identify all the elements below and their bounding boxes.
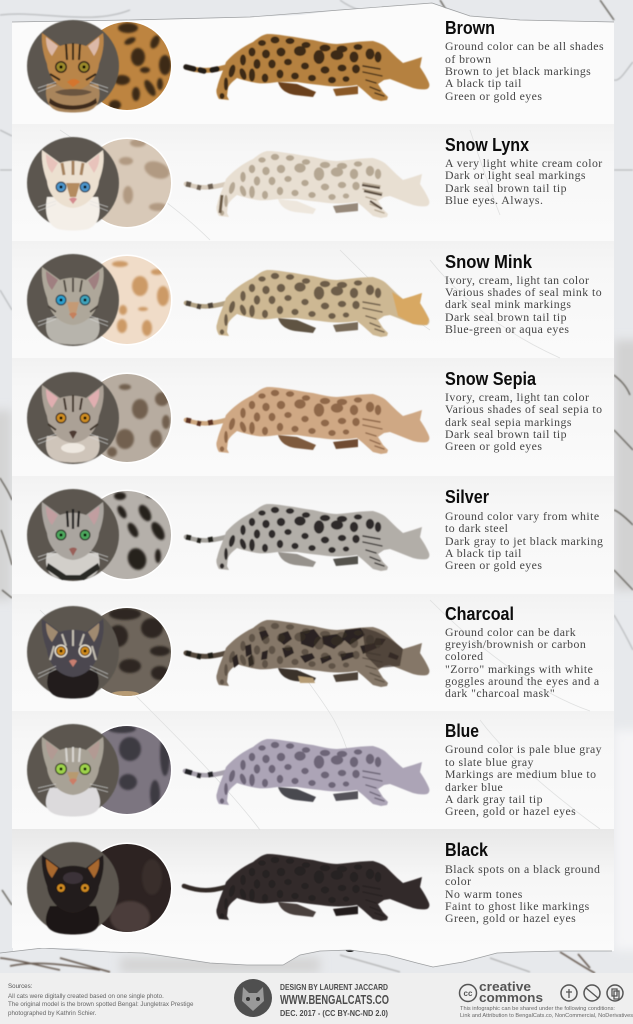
- description: Blue eyes. Always.: [445, 193, 543, 207]
- face portrait: [27, 606, 119, 698]
- row: Snow Mink: [27, 254, 429, 349]
- row: Blue: [27, 724, 429, 819]
- description: A very light white cream color: [445, 156, 603, 170]
- description: dark seal sepia markings: [445, 415, 572, 429]
- design credit: DESIGN BY LAURENT JACCARD: [280, 982, 388, 992]
- fur swatch: [101, 22, 171, 110]
- fur swatch: [101, 606, 171, 696]
- face portrait: [27, 724, 119, 816]
- description: Dark seal brown tail tip: [445, 427, 567, 441]
- full body cat: [186, 387, 429, 454]
- full body cat: [186, 151, 429, 218]
- description: dark seal mink markings: [445, 297, 571, 311]
- description: Green or gold eyes: [445, 439, 542, 453]
- description: Various shades of seal sepia to: [445, 402, 602, 416]
- description: Ground color vary from white: [445, 509, 600, 523]
- description: greyish/brownish or carbon: [445, 637, 586, 651]
- fur swatch: [101, 372, 171, 462]
- row: Charcoal: [27, 606, 429, 701]
- face portrait: [27, 372, 119, 464]
- description: Blue-green or aqua eyes: [445, 322, 569, 336]
- creative commons logo: cc: [464, 989, 473, 998]
- description: goggles around the eyes and a: [445, 674, 600, 688]
- heading: Snow Sepia: [445, 369, 537, 389]
- description: to slate blue gray: [445, 755, 534, 769]
- fur swatch: [100, 842, 172, 932]
- description: to dark steel: [445, 521, 509, 535]
- description: dark "charcoal mask": [445, 686, 555, 700]
- row: Snow Sepia: [27, 372, 429, 467]
- description: darker blue: [445, 780, 503, 794]
- description: Dark seal brown tail tip: [445, 181, 567, 195]
- row: Black: [27, 842, 429, 937]
- description: Green or gold eyes: [445, 89, 542, 103]
- description: A black tip tail: [445, 76, 522, 90]
- description: Dark seal brown tail tip: [445, 310, 567, 324]
- creative commons logo: commons: [479, 990, 543, 1005]
- licence text: This infographic can be shared under the following conditions:: [460, 1006, 615, 1012]
- face portrait: [27, 20, 119, 112]
- face portrait: [27, 254, 119, 346]
- description: colored: [445, 649, 483, 663]
- description: Green, gold or hazel eyes: [445, 804, 576, 818]
- text: Silver: [445, 487, 603, 572]
- heading: Charcoal: [445, 604, 514, 624]
- description: "Zorro" markings with white: [445, 662, 593, 676]
- heading: Silver: [445, 487, 489, 507]
- design credit: WWW.BENGALCATS.CO: [280, 993, 389, 1007]
- full body cat: [186, 34, 429, 101]
- creative commons logo: creative: [479, 979, 531, 994]
- description: Dark gray to jet black marking: [445, 534, 603, 548]
- text: Snow Lynx: [445, 135, 603, 207]
- sources text: photographed by Kathrin Schier.: [8, 1010, 97, 1017]
- text: Brown: [445, 18, 604, 103]
- description: A dark gray tail tip: [445, 792, 543, 806]
- text: Snow Mink: [445, 252, 602, 336]
- fur swatch: [102, 490, 171, 579]
- face portrait: [27, 489, 119, 581]
- description: Ivory, cream, light tan color: [445, 273, 589, 287]
- description: color: [445, 874, 471, 888]
- description: Black spots on a black ground: [445, 862, 600, 876]
- heading: Black: [445, 840, 489, 860]
- fur swatch: [102, 254, 171, 344]
- description: Faint to ghost like markings: [445, 899, 590, 913]
- full body cat: [186, 620, 429, 687]
- footer: [0, 973, 633, 1024]
- text: Snow Sepia: [445, 369, 602, 453]
- fur swatch: [101, 724, 171, 814]
- heading: Snow Lynx: [445, 135, 529, 155]
- description: Ground color can be all shades: [445, 39, 604, 53]
- licence icons: [561, 985, 623, 1001]
- sources text: The original model is the brown spotted Bengal: Jungletrax Prestige: [8, 1001, 194, 1008]
- description: Brown to jet black markings: [445, 64, 591, 78]
- description: Various shades of seal mink to: [445, 285, 602, 299]
- full body cat: [184, 854, 429, 921]
- description: Ground color is pale blue gray: [445, 742, 602, 756]
- description: Ground color can be dark: [445, 625, 576, 639]
- text: Black: [445, 840, 600, 925]
- logo: cat badge: [234, 979, 272, 1017]
- heading: Brown: [445, 18, 495, 38]
- row: Brown: [27, 20, 429, 115]
- creative commons logo: [460, 979, 543, 1005]
- text: Charcoal: [445, 604, 600, 700]
- description: Markings are medium blue to: [445, 767, 596, 781]
- fur swatch: [102, 138, 171, 227]
- heading: Snow Mink: [445, 252, 533, 272]
- face portrait: [27, 137, 119, 230]
- heading: Blue: [445, 721, 479, 741]
- description: Dark or light seal markings: [445, 168, 586, 182]
- description: of brown: [445, 52, 491, 66]
- text: Blue: [445, 721, 602, 818]
- licence text: Link and Attribution to BengalCats.co, NonCommercial, NoDerivatives: [460, 1013, 633, 1019]
- sources text: Sources:: [8, 983, 33, 990]
- description: A black tip tail: [445, 546, 522, 560]
- row: Silver: [27, 489, 429, 584]
- sources text: All cats were digitally created based on one single photo.: [8, 993, 164, 1000]
- description: Ivory, cream, light tan color: [445, 390, 589, 404]
- full body cat: [186, 270, 429, 337]
- description: No warm tones: [445, 887, 523, 901]
- row: Snow Lynx: [27, 137, 429, 232]
- description: Green or gold eyes: [445, 558, 542, 572]
- full body cat: [186, 504, 429, 571]
- face portrait: [27, 842, 119, 934]
- description: Green, gold or hazel eyes: [445, 911, 576, 925]
- full body cat: [185, 739, 429, 806]
- design credit: DEC. 2017 - (CC BY-NC-ND 2.0): [280, 1008, 388, 1018]
- design credit: [280, 982, 389, 1018]
